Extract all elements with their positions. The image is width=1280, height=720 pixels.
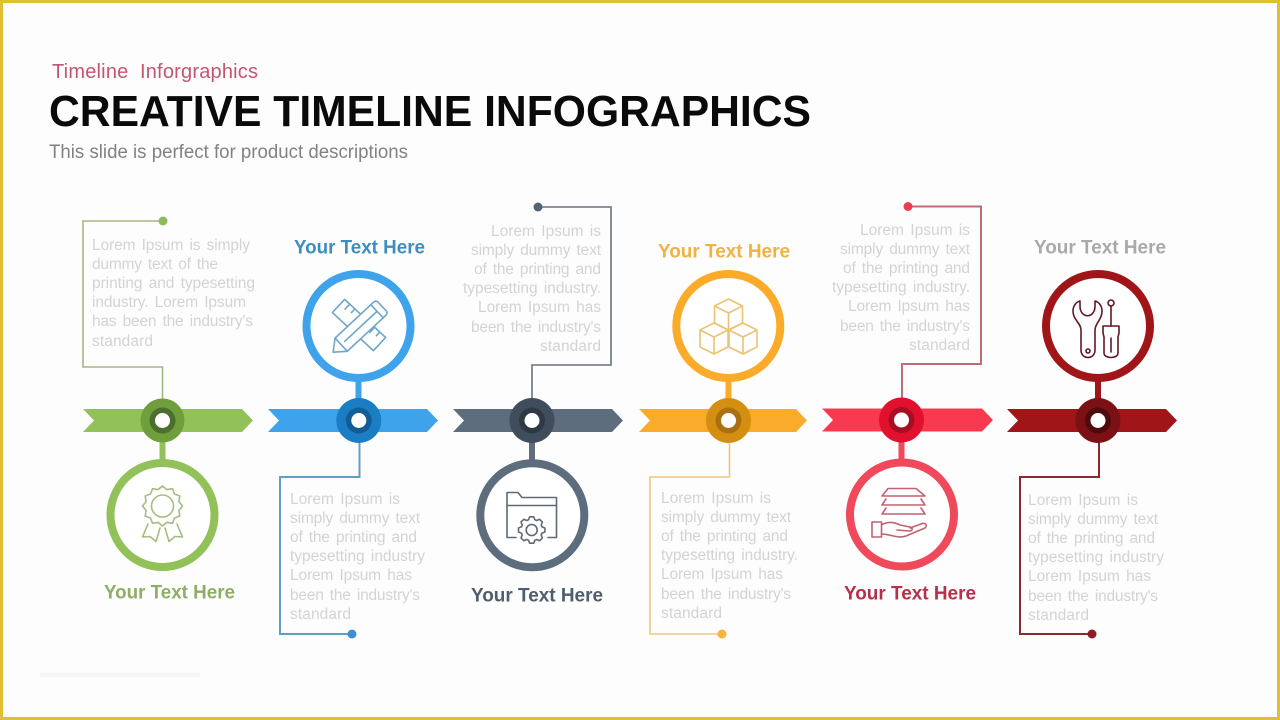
description text: been the industry's	[1028, 588, 1158, 605]
description text: simply dummy text	[471, 242, 602, 259]
description text: printing and typesetting	[92, 275, 255, 292]
timeline node	[706, 398, 751, 443]
heading: Your Text Here	[1034, 238, 1166, 258]
description text: industry. Lorem Ipsum	[92, 294, 246, 311]
connector	[160, 440, 166, 462]
description text: standard	[290, 606, 351, 623]
icon: ruler and pencil	[327, 299, 388, 359]
timeline node	[140, 398, 184, 442]
description text: standard	[540, 338, 601, 355]
timeline step 2: blue	[268, 238, 438, 638]
description text: Lorem Ipsum has	[290, 567, 412, 584]
timeline node	[1076, 398, 1120, 443]
heading: Your Text Here	[844, 584, 976, 604]
icon: stacked cubes	[700, 299, 757, 354]
description text: standard	[661, 605, 722, 622]
description text	[1028, 492, 1164, 624]
leader line with dot	[83, 216, 168, 400]
description text: typesetting industry.	[661, 547, 798, 564]
description text: of the printing and	[843, 260, 970, 277]
description text: standard	[1028, 607, 1089, 624]
description text	[832, 222, 971, 354]
description text: Lorem Ipsum is simply	[92, 237, 250, 254]
connector	[356, 378, 362, 400]
description text: Lorem Ipsum has	[848, 298, 970, 315]
arrow band	[822, 408, 993, 432]
icon ring	[480, 463, 584, 567]
description text: Lorem Ipsum is	[491, 223, 601, 240]
heading: Your Text Here	[294, 238, 425, 258]
description text: Lorem Ipsum has	[1028, 568, 1151, 585]
timeline node	[336, 398, 381, 443]
description text: Lorem Ipsum is	[661, 490, 771, 507]
description text: typesetting industry	[290, 548, 425, 565]
description text: been the industry's	[471, 319, 601, 336]
timeline step 1: green	[83, 216, 255, 604]
icon ring	[306, 274, 410, 378]
connector	[726, 378, 732, 400]
connector	[1095, 378, 1101, 400]
arrow band	[268, 409, 438, 432]
description text: typesetting industry	[1028, 549, 1164, 566]
description text	[463, 223, 602, 355]
icon: folder with gear	[507, 492, 556, 543]
description text: standard	[92, 333, 153, 350]
icon: wrench and screwdriver	[1073, 300, 1119, 358]
description text: of the printing and	[474, 261, 601, 278]
description text	[290, 491, 425, 623]
description text: simply dummy text	[661, 509, 792, 526]
timeline step 4: amber	[639, 242, 807, 638]
description text: typesetting industry.	[463, 280, 601, 297]
description text: Lorem Ipsum is	[860, 222, 970, 239]
leader line with dot	[650, 440, 730, 638]
heading: Your Text Here	[471, 586, 603, 606]
description text: dummy text of the	[92, 256, 218, 273]
arrow band	[453, 409, 623, 432]
icon ring	[1046, 274, 1150, 378]
description text: standard	[909, 337, 970, 354]
eyebrow text: Timeline Inforgraphics	[52, 61, 258, 83]
timeline node	[879, 398, 924, 442]
timeline step 5: red	[822, 202, 993, 604]
description text: been the industry's	[840, 318, 970, 335]
description text: Lorem Ipsum has	[661, 566, 783, 583]
title: CREATIVE TIMELINE INFOGRAPHICS	[49, 87, 811, 136]
description text	[661, 490, 798, 622]
description text	[92, 237, 255, 350]
timeline step 6: dark red	[1007, 238, 1177, 638]
description text: Lorem Ipsum is	[1028, 492, 1138, 509]
leader line with dot	[902, 202, 981, 400]
description text: Lorem Ipsum has	[478, 299, 601, 316]
icon: award ribbon	[142, 486, 182, 542]
arrow band	[83, 409, 253, 432]
description text: has been the industry's	[92, 313, 253, 330]
leader line with dot	[1020, 440, 1099, 638]
description text: Lorem Ipsum is	[290, 491, 400, 508]
timeline step 3: slate	[453, 202, 623, 606]
leader line with dot	[532, 202, 611, 400]
heading: Your Text Here	[104, 582, 235, 604]
description text: of the printing and	[661, 528, 788, 545]
icon: layers on hand	[872, 488, 926, 537]
icon ring	[850, 462, 954, 566]
description text: simply dummy text	[840, 241, 971, 258]
arrow band	[1007, 409, 1177, 432]
description text: simply dummy text	[290, 510, 421, 527]
connector	[529, 440, 535, 462]
icon ring	[110, 463, 214, 567]
timeline node	[510, 398, 554, 443]
description text: been the industry's	[290, 587, 420, 604]
description text: typesetting industry.	[832, 279, 970, 296]
connector	[898, 440, 904, 462]
leader line with dot	[280, 440, 360, 638]
description text: of the printing and	[290, 529, 417, 546]
description text: of the printing and	[1028, 530, 1155, 547]
subtitle: This slide is perfect for product descriptions	[49, 142, 408, 163]
description text: been the industry's	[661, 586, 791, 603]
description text: simply dummy text	[1028, 511, 1159, 528]
heading: Your Text Here	[658, 242, 790, 262]
icon ring	[676, 274, 780, 378]
arrow band	[639, 409, 807, 432]
header: eyebrow, title and subtitle	[49, 61, 811, 163]
